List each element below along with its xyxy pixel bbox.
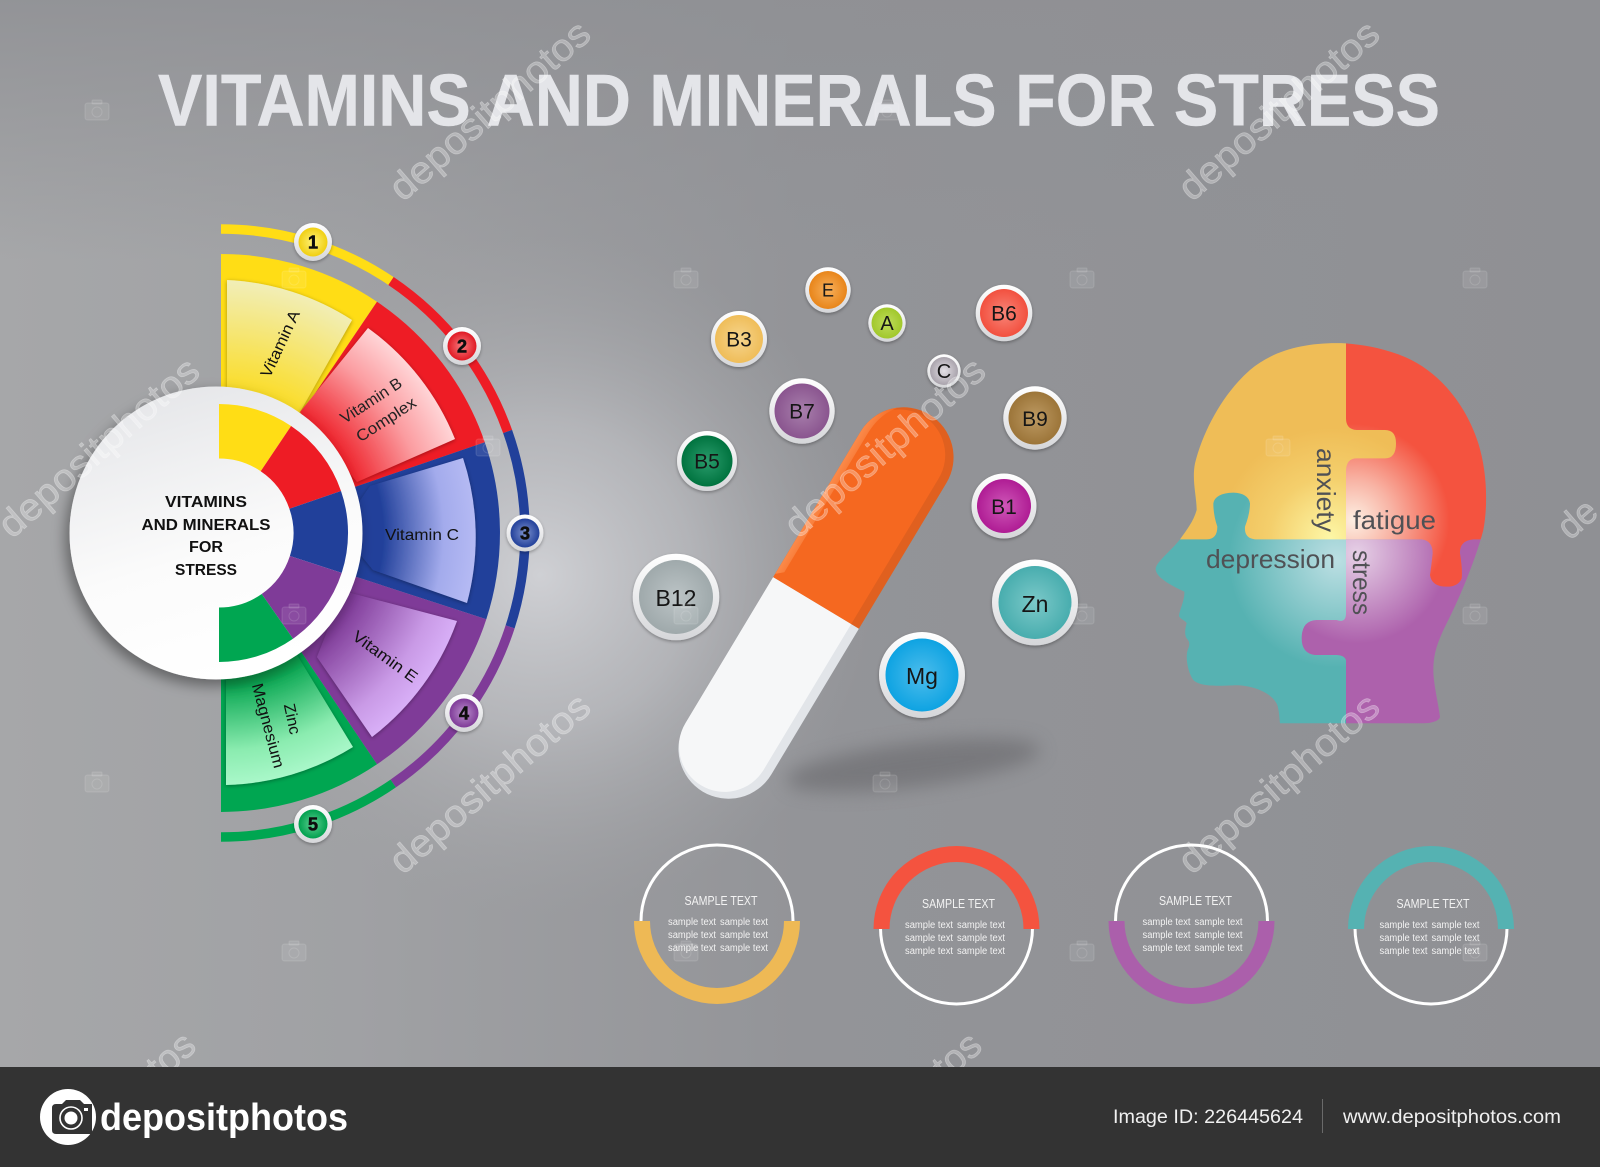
bubble B9 (1003, 386, 1067, 450)
center heading: AND MINERALS (142, 517, 271, 534)
puzzle piece: red (1346, 343, 1486, 587)
bubble E: E (822, 280, 834, 300)
label: vitamin A: Vitamin A (258, 308, 304, 380)
panel: vitamin C (340, 458, 476, 603)
sample text circle 1: sample text (668, 917, 716, 928)
watermark: tos (924, 1024, 990, 1089)
outer numbered arc ring (221, 229, 525, 837)
bubble B12: B12 (656, 585, 696, 611)
badge 4 (445, 694, 483, 732)
bubble B3 (711, 311, 767, 367)
wheel segments (221, 254, 500, 812)
watermark: depositphotos (776, 349, 994, 546)
badge 2: 2 (457, 336, 467, 356)
capsule shadow (783, 728, 1043, 802)
bubble A (868, 304, 906, 342)
bubble Zn (992, 560, 1078, 646)
bubble B5: B5 (694, 450, 720, 474)
puzzle piece: yellow (1180, 343, 1396, 540)
center heading: FOR (189, 539, 223, 556)
capsule orange half (773, 389, 972, 629)
sample text circle 3: sample text (1142, 930, 1191, 941)
website url: www.depositphotos.com (1342, 1107, 1561, 1128)
head labels: stress (1347, 550, 1377, 615)
sample text circle 2: sample text (957, 920, 1005, 931)
sample text circle 2: sample text (957, 946, 1005, 957)
head labels: fatigue (1353, 505, 1436, 535)
bubble C: C (937, 361, 951, 383)
label: vitamin C: Vitamin C (385, 527, 459, 544)
head labels (1206, 448, 1436, 615)
watermark: depositphotos (1170, 12, 1388, 209)
label: vitamin B complex (338, 375, 420, 446)
label: vitamin B complex: Vitamin B (338, 375, 406, 427)
sample text circle 2: sample text (957, 933, 1005, 944)
badge 2 (443, 327, 481, 365)
head labels: depression (1206, 544, 1335, 574)
bubble A: A (880, 313, 894, 335)
panel: vitamin B complex (300, 328, 455, 482)
badge 4: 4 (459, 704, 469, 724)
sample text circle 3: sample text (1142, 943, 1191, 954)
bubble B12 (633, 554, 719, 640)
bubble B3: B3 (726, 328, 752, 352)
sample text circle 1: sample text (720, 930, 768, 941)
inner colored ring (219, 404, 348, 662)
logo wordmark: depositphotos (100, 1097, 348, 1139)
sample text circle 1: sample text (720, 917, 768, 928)
sample text circle 3: sample text (1194, 930, 1243, 941)
image id: Image ID: 226445624 (1113, 1107, 1303, 1128)
panel: zinc magnesium (226, 655, 353, 785)
badge 3: 3 (520, 524, 530, 544)
sample text circle 2: sample text (905, 946, 953, 957)
center disc (70, 386, 362, 680)
badge 5 (294, 805, 332, 843)
sample text circle 1: sample text (668, 930, 716, 941)
badge 3 (506, 514, 544, 552)
watermark: depositphotos (381, 685, 599, 882)
sample text circle 4: SAMPLE TEXT (1396, 896, 1470, 911)
badge 1: 1 (308, 232, 318, 252)
label: zinc magnesium (248, 682, 303, 770)
bubble B1 (972, 474, 1036, 538)
logo icon (40, 1089, 96, 1145)
title: VITAMINS AND MINERALS FOR STRESS (158, 60, 1440, 142)
label: vitamin B complex: Complex (353, 395, 420, 446)
watermark: tos (138, 1024, 204, 1089)
label: zinc magnesium: Zinc (280, 702, 303, 736)
head puzzle (1156, 343, 1486, 724)
bubble B9: B9 (1022, 408, 1048, 431)
center heading: VITAMINS (165, 494, 247, 511)
bubble B7: B7 (789, 400, 815, 424)
vitamin bubbles (633, 267, 1078, 718)
sample text circle 3: sample text (1194, 917, 1243, 928)
sample text circle 3: sample text (1194, 943, 1243, 954)
watermark: depositphotos (381, 12, 599, 209)
sample text circle 4 (1355, 852, 1507, 1004)
sample text circle 3: sample text (1142, 917, 1191, 928)
capsule (660, 389, 972, 817)
sample text circle 2: sample text (905, 920, 953, 931)
sample text circle 2: sample text (905, 933, 953, 944)
panel: vitamin E (317, 591, 457, 737)
bubble Mg: Mg (906, 663, 938, 689)
head labels: anxiety (1311, 448, 1341, 532)
sample text circle 3: SAMPLE TEXT (1159, 893, 1232, 908)
sample text circle 2: SAMPLE TEXT (922, 896, 995, 911)
bubble B1: B1 (991, 496, 1017, 519)
bubble B6 (976, 285, 1032, 341)
sample text circle 4: sample text (1432, 946, 1480, 957)
bubble E (805, 267, 851, 313)
sample text circle 4: sample text (1380, 946, 1428, 957)
bubble B7 (769, 378, 835, 444)
label: zinc magnesium: Magnesium (248, 682, 287, 770)
sample text circle 1: sample text (668, 943, 716, 954)
bubble Zn: Zn (1022, 591, 1048, 617)
sample text circle 1 (641, 845, 793, 997)
sample text circle 4: sample text (1432, 933, 1480, 944)
sample text circle 1: sample text (720, 943, 768, 954)
badge 1 (294, 223, 332, 261)
center heading (142, 494, 271, 579)
bubble B5 (677, 431, 737, 491)
sample text circle 1: SAMPLE TEXT (684, 893, 758, 908)
badge 5: 5 (308, 814, 318, 834)
footer bar (0, 1067, 1600, 1167)
puzzle piece: purple (1302, 540, 1481, 724)
label: vitamin E: Vitamin E (349, 628, 420, 687)
sample text circle 4: sample text (1432, 920, 1480, 931)
bubble C (927, 354, 961, 388)
center heading: STRESS (175, 562, 237, 579)
watermark: depositphotos (1170, 685, 1388, 882)
puzzle piece: teal (1156, 488, 1346, 724)
sample text circle 4: sample text (1380, 933, 1428, 944)
sample text circle 2 (880, 852, 1032, 1004)
bubble B6: B6 (991, 302, 1017, 326)
sample text circle 3 (1116, 845, 1268, 997)
capsule white half (660, 577, 859, 817)
wheel diagram (70, 223, 544, 843)
panel: vitamin A (227, 280, 352, 460)
sample text circle 4: sample text (1380, 920, 1428, 931)
bubble Mg (879, 632, 965, 718)
